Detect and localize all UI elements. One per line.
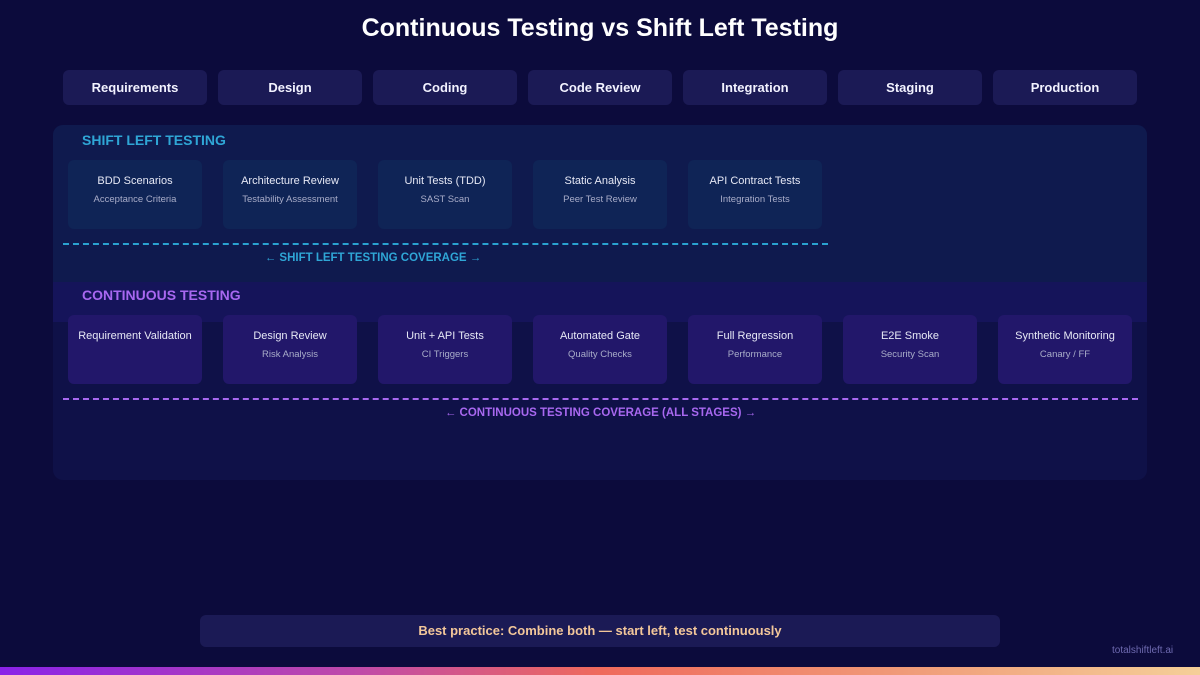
- card: BDD: BDD Scenarios: [97, 175, 173, 187]
- card: unit api: [378, 315, 512, 384]
- card: API contract: [688, 160, 822, 229]
- callout: best practice: [200, 615, 1000, 647]
- card: unit tests: [378, 160, 512, 229]
- card: e2e smoke: [843, 315, 977, 384]
- panel: continuous band: [53, 282, 1147, 322]
- card: static analysis: Peer Test Review: [563, 194, 637, 205]
- card: unit tests: Unit Tests (TDD): [404, 175, 486, 187]
- stage: coding: Coding: [423, 80, 467, 95]
- card: architecture: Architecture Review: [241, 175, 339, 187]
- card: unit tests: SAST Scan: [421, 194, 469, 205]
- card: full regression: [688, 315, 822, 384]
- stage: staging: [838, 70, 982, 105]
- shift left coverage label: ← SHIFT LEFT TESTING COVERAGE →: [265, 252, 481, 264]
- callout: best practice: Best practice: Combine both — start left, test continuously: [418, 623, 782, 638]
- stage: integration: Integration: [721, 80, 789, 95]
- footer brand: totalshiftleft.ai: [1112, 645, 1173, 656]
- title: Continuous Testing vs Shift Left Testing: [362, 14, 838, 42]
- card: automated gate: [533, 315, 667, 384]
- card: API contract: Integration Tests: [720, 194, 790, 205]
- stage: design: Design: [268, 80, 312, 95]
- card: full regression: Performance: [728, 349, 782, 360]
- stage: staging: Staging: [886, 80, 934, 95]
- shift left cards: [68, 160, 822, 229]
- card: architecture: [223, 160, 357, 229]
- stage: production: [993, 70, 1137, 105]
- continuous coverage line: [63, 398, 1138, 400]
- stage: requirements: [63, 70, 207, 105]
- card: design review: Design Review: [253, 330, 327, 342]
- continuous coverage label: ← CONTINUOUS TESTING COVERAGE (ALL STAGES) →: [445, 407, 756, 419]
- stage: code review: [528, 70, 672, 105]
- card: synthetic monitoring: Synthetic Monitoring: [1015, 330, 1115, 342]
- bottom gradient bar: [0, 667, 1200, 675]
- card: BDD: [68, 160, 202, 229]
- card: automated gate: Quality Checks: [568, 349, 632, 360]
- card: BDD: Acceptance Criteria: [94, 194, 176, 205]
- card: static analysis: Static Analysis: [565, 175, 635, 187]
- card: synthetic monitoring: [998, 315, 1132, 384]
- stage: integration: [683, 70, 827, 105]
- card: design review: Risk Analysis: [262, 349, 318, 360]
- card: requirement validation: [68, 315, 202, 384]
- stage: coding: [373, 70, 517, 105]
- card: design review: [223, 315, 357, 384]
- card: architecture: Testability Assessment: [242, 194, 338, 205]
- panel: shift left band: [53, 125, 1147, 282]
- card: automated gate: Automated Gate: [560, 330, 640, 342]
- stage row: [63, 70, 1137, 105]
- card: static analysis: [533, 160, 667, 229]
- stage: code review: Code Review: [560, 80, 640, 95]
- card: API contract: API Contract Tests: [710, 175, 800, 187]
- card: full regression: Full Regression: [717, 330, 793, 342]
- panel: comparison: [53, 125, 1147, 480]
- stage: requirements: Requirements: [92, 80, 178, 95]
- card: e2e smoke: E2E Smoke: [881, 330, 939, 342]
- continuous cards: [68, 315, 1132, 384]
- stage: design: [218, 70, 362, 105]
- card: synthetic monitoring: Canary / FF: [1040, 349, 1090, 360]
- card: unit api: CI Triggers: [422, 349, 468, 360]
- card: requirement validation: Requirement Validation: [78, 330, 192, 342]
- heading: continuous testing: CONTINUOUS TESTING: [82, 287, 241, 303]
- card: unit api: Unit + API Tests: [406, 330, 484, 342]
- stage: production: Production: [1031, 80, 1099, 95]
- shift left coverage line: [63, 243, 828, 245]
- heading: shift left testing: SHIFT LEFT TESTING: [82, 132, 226, 148]
- card: e2e smoke: Security Scan: [881, 349, 939, 360]
